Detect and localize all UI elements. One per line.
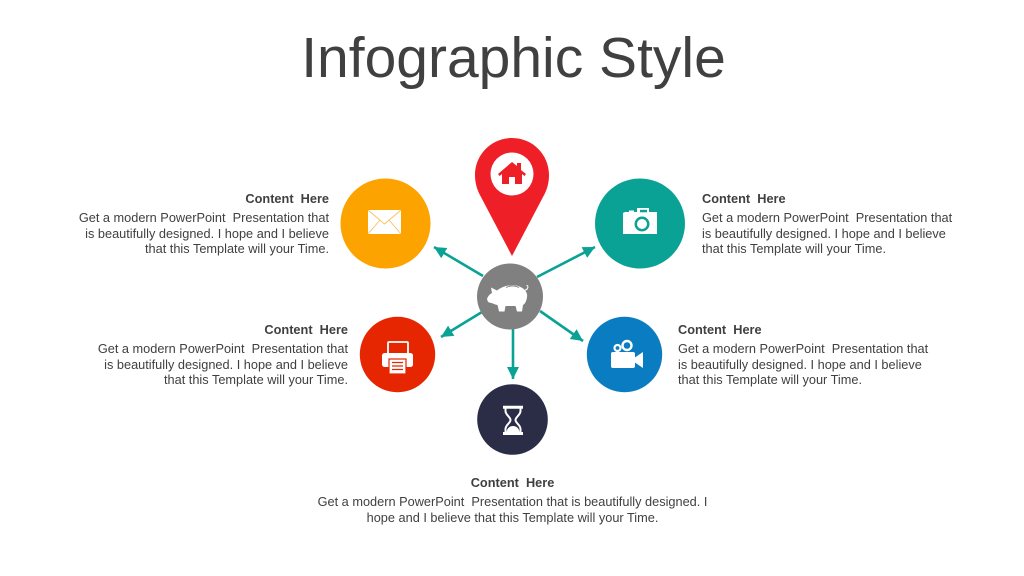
icon: video camera	[611, 341, 643, 368]
text block: upper right: Content Here	[702, 191, 786, 206]
text block: bottom: Get a modern PowerPoint Presentation that is beautifully designed. I hope and I believe that this Template will your Time.	[318, 494, 707, 524]
arrow: upper left	[434, 247, 483, 276]
orange circle with envelope icon	[340, 178, 430, 268]
arrow: upper right	[537, 247, 595, 277]
icon: piggy bank	[487, 285, 528, 312]
navy circle with hourglass icon	[477, 384, 548, 455]
text block: lower left: Get a modern PowerPoint Presentation that is beautifully designed. I hope and I believe that this Template will your Time.	[98, 341, 348, 387]
icon: camera	[623, 208, 657, 234]
title: Infographic Style	[301, 26, 726, 90]
grey circle with piggy bank icon	[477, 264, 543, 330]
arrows	[434, 247, 595, 379]
text block: upper left: Content Here	[245, 191, 329, 206]
teal circle with camera icon	[595, 178, 685, 268]
text block: upper left: Get a modern PowerPoint Presentation that is beautifully designed. I hope and I believe that this Template will your Time.	[79, 210, 329, 256]
red circle with printer icon	[360, 317, 435, 392]
map pin with home icon	[475, 138, 549, 256]
text block: bottom: Content Here	[471, 475, 554, 490]
text block: lower left: Content Here	[264, 322, 348, 337]
icon: hourglass	[503, 407, 523, 434]
blue circle with video camera icon	[587, 317, 662, 392]
text block: lower right: Content Here	[678, 322, 762, 337]
arrow: down	[512, 328, 514, 379]
arrow: lower left	[441, 312, 482, 337]
text block: upper right: Get a modern PowerPoint Presentation that is beautifully designed. I hope and I believe that this Template will your Time.	[702, 210, 952, 256]
text block: bottom	[318, 475, 707, 524]
icon: home	[498, 162, 526, 184]
arrow: lower right	[540, 311, 583, 341]
icon: envelope	[368, 210, 401, 234]
icon: printer	[382, 342, 413, 374]
text block: lower right: Get a modern PowerPoint Presentation that is beautifully designed. I hope and I believe that this Template will your Time.	[678, 341, 928, 387]
